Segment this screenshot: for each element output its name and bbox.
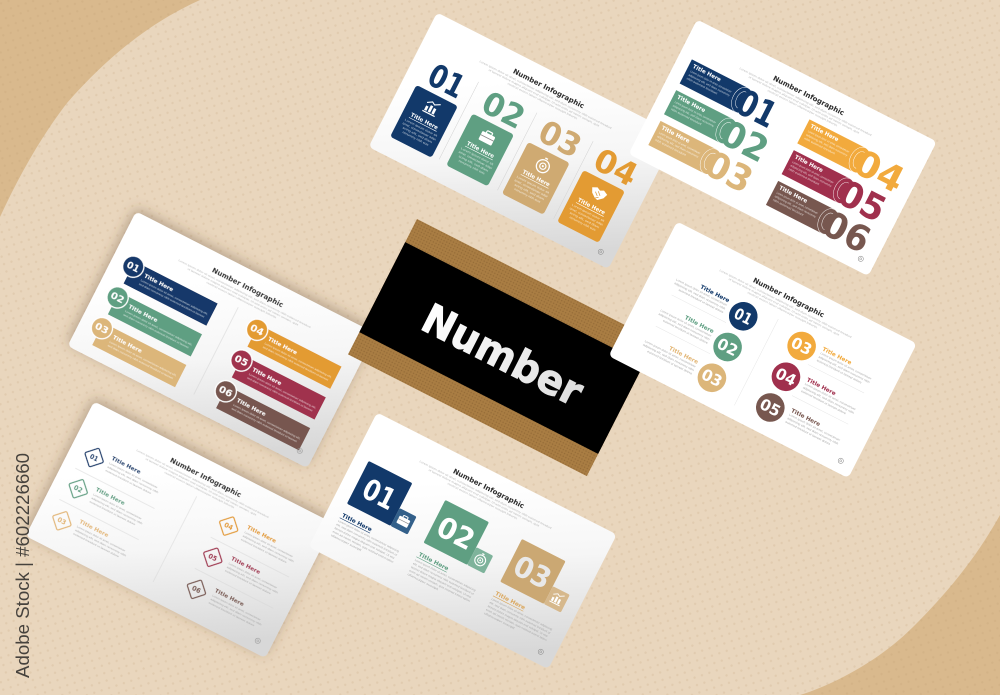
item 03: euismod tincidunt ut laoreet dolore: [73, 532, 120, 559]
item 05: Lorem ipsum dolor sit amet, consectetuer: [788, 413, 841, 442]
card 3: Lorem ipsum dolor sit: [516, 175, 550, 195]
ribbon 01: Title Here: [143, 273, 174, 293]
heading: Number Infographic: [452, 467, 526, 510]
ribbon 03: sed diam nonummy nibh euismod tincidunt ut laoreet: [107, 343, 174, 380]
item 05: Lorem ipsum dolor sit amet, consectetuer: [228, 561, 278, 590]
panel: six cylinder bars slide: [629, 19, 937, 276]
ribbon 02: Title Here: [127, 304, 159, 324]
intro text: ut laoreet dolore magna aliquam erat volutpat. Ut wisi enim ad minim veniam, quis: [428, 468, 541, 528]
item 03 left: Title Here: [668, 346, 699, 366]
icon: copyright mark: [537, 648, 544, 655]
panel: ribbon bars slide: [68, 211, 376, 468]
item 05: Title Here: [790, 408, 821, 428]
cover title: Number: [414, 294, 592, 416]
band texture: [348, 219, 656, 476]
block 03: Lorem ipsum dolor sit amet, consectetuer adipiscing: [491, 597, 553, 632]
bar 06: Title Here: [778, 185, 808, 205]
item 04: euismod tincidunt ut laoreet dolore: [240, 537, 288, 564]
bar 04: nibh euismod tincidunt: [804, 136, 836, 155]
item 06: Title Here: [213, 588, 245, 608]
item 03 left: euismod tincidunt ut laoreet dolore: [647, 349, 693, 376]
bar 05: 05: [831, 173, 892, 231]
ribbon 01: Lorem ipsum dolor sit amet, consectetuer adipiscing elit,: [140, 278, 209, 316]
number 03: 03: [532, 112, 588, 166]
item 04: [767, 358, 861, 425]
slide background: [369, 12, 677, 269]
card 3: scing elit, sed diam: [514, 183, 546, 201]
heading: Number Infographic: [752, 276, 826, 319]
item 06: [182, 575, 268, 633]
item 04: 04: [223, 521, 234, 532]
card 2: Lorem ipsum dolor sit: [460, 146, 494, 166]
ribbon 04: Title Here: [267, 337, 298, 357]
ribbon 06: [207, 376, 313, 450]
slide background: [609, 221, 917, 478]
item 05: euismod tincidunt ut laoreet dolore: [224, 569, 272, 595]
intro text: Lorem ipsum dolor sit amet, consectetuer adipiscing elit, sed diam nonummy nibh euismod tincidunt: [739, 66, 873, 137]
card 1: Title Here: [409, 112, 439, 131]
card 2: [446, 114, 514, 186]
intro text: ut laoreet dolore magna aliquam erat volutpat. Ut wisi enim ad minim veniam, quis: [748, 75, 861, 135]
block 02: ullamcorper suscipit: [407, 572, 439, 591]
bar 01: adipiscing elit, sed diam nonummy: [688, 73, 731, 98]
item 02: Title Here: [683, 315, 715, 335]
intro text: ut laoreet dolore magna aliquam erat volutpat. Ut wisi enim ad minim veniam, quis: [488, 68, 601, 128]
intro text: [736, 66, 873, 143]
card 3: nonummy nibh euis: [514, 187, 542, 204]
slide background: [26, 401, 334, 658]
item 04: Title Here: [805, 377, 837, 397]
card 1: Lorem ipsum dolor sit: [404, 118, 438, 138]
item 03 left: adipiscing elit, sed diam nonummy nibh: [642, 343, 695, 372]
bar 02: Title Here: [676, 95, 706, 114]
card 4: [557, 170, 625, 243]
intro text: nostrud exerci tation ullamcorper suscipit lobortis: [507, 81, 579, 121]
card 3: amet, consectetuer adipi: [514, 178, 549, 199]
ribbon 02: [99, 282, 205, 357]
intro text: [175, 258, 312, 335]
block 01: Lorem ipsum dolor sit amet, consectetuer adipiscing: [337, 519, 400, 553]
icon: copyright mark: [254, 637, 261, 644]
bar 03: Lorem ipsum dolor sit amet, consectetuer: [658, 131, 701, 155]
item 04: 04: [772, 364, 799, 390]
ribbon 05: Lorem ipsum dolor sit amet, consectetuer adipiscing elit,: [248, 372, 317, 410]
bar 06: [762, 176, 877, 262]
intro text: ut laoreet dolore magna aliquam erat volutpat. Ut wisi enim ad minim veniam, quis: [728, 277, 841, 337]
brown band background: [348, 219, 656, 476]
intro text: nostrud exerci tation ullamcorper suscipit lobortis: [206, 280, 278, 320]
card 2: Title Here: [465, 141, 495, 160]
item 05: 05: [207, 552, 218, 563]
bar 05: Title Here: [793, 155, 824, 174]
bar 06: nibh euismod tincidunt: [772, 198, 805, 217]
icon: copyright mark: [296, 447, 303, 454]
intro text: Lorem ipsum dolor sit amet, consectetuer adipiscing elit, sed diam nonummy nibh euismod tincidunt: [719, 268, 853, 339]
item 03 right: 03: [788, 334, 815, 359]
bar 04: adipiscing elit, sed diam nonummy: [805, 133, 849, 157]
item 02: adipiscing elit, sed diam nonummy nibh: [658, 312, 711, 342]
item 03 left: [637, 330, 731, 397]
item 02: 02: [72, 484, 84, 495]
card 4: nonummy nibh euis: [569, 215, 597, 232]
ribbon 01: [114, 251, 220, 326]
item 04: euismod tincidunt ut laoreet dolore: [800, 389, 847, 415]
column dividers: [439, 82, 594, 219]
block 03: Title Here: [494, 591, 526, 612]
bar 01: Title Here: [691, 64, 722, 83]
card 4: amet, consectetuer adipi: [569, 206, 604, 227]
ribbon 05: 05: [232, 353, 250, 369]
ribbon 03: Title Here: [111, 335, 143, 355]
bar 04: Title Here: [809, 124, 840, 143]
block 02: Lorem ipsum dolor sit amet, consectetuer adipiscing: [414, 558, 477, 592]
ribbon 03: [83, 313, 189, 387]
ribbon 06: Lorem ipsum dolor sit amet, consectetuer adipiscing elit,: [233, 403, 301, 441]
item 04: [214, 512, 300, 569]
bar 06: 06: [815, 204, 877, 262]
bar 03: [644, 116, 759, 202]
slide background: [68, 211, 376, 468]
ribbon 03: 03: [93, 321, 110, 337]
card 4: scing elit, sed diam: [569, 211, 601, 230]
dividers: [45, 441, 303, 636]
item 02: [64, 474, 149, 532]
black center band: [359, 242, 644, 454]
ribbon 06: 06: [217, 384, 234, 400]
card 4: Title Here: [576, 198, 606, 217]
intro text: nostrud exerci tation ullamcorper suscipit lobortis: [767, 88, 839, 128]
item 02: 02: [714, 335, 741, 360]
intro text: Lorem ipsum dolor sit amet, consectetuer adipiscing elit, sed diam nonummy nibh euismod tincidunt: [479, 59, 613, 130]
item 03: adipiscing elit, sed diam nonummy nibh: [74, 528, 127, 558]
panel: four numbered cards slide: [369, 12, 677, 269]
number 01: 01: [422, 56, 471, 106]
item 02: adipiscing elit, sed diam nonummy nibh: [91, 496, 144, 526]
item 06: 06: [190, 584, 202, 595]
ribbon 05: sed diam nonummy nibh euismod tincidunt ut laoreet: [246, 376, 313, 413]
item 01: Title Here: [699, 284, 730, 304]
icon: copyright mark: [837, 457, 844, 464]
item 02: euismod tincidunt ut laoreet dolore: [662, 319, 709, 345]
bar 05: nibh euismod tincidunt: [788, 167, 820, 186]
block 03: [483, 539, 583, 646]
dividers: [640, 271, 876, 455]
card 1: [390, 85, 458, 158]
ribbon 05: Title Here: [251, 367, 282, 387]
item 03 right: adipiscing elit, sed diam nonummy nibh: [818, 355, 871, 384]
item 03: [48, 507, 132, 564]
ribbon 02: Lorem ipsum dolor sit amet, consectetuer adipiscing elit,: [124, 309, 193, 347]
intro text: [416, 459, 553, 536]
card 1: scing elit, sed diam: [402, 126, 434, 144]
intro text: nostrud exerci tation ullamcorper suscipit lobortis: [447, 481, 519, 521]
card 3: [502, 142, 570, 215]
block 02: 02: [431, 510, 480, 557]
panel: diamond outline list slide: [26, 401, 334, 658]
item 02: [653, 300, 747, 366]
ribbon 02: 02: [108, 290, 126, 306]
intro text: nostrud exerci tation ullamcorper suscipit lobortis: [747, 290, 819, 330]
bar 03: 03: [698, 144, 759, 202]
item 02: Lorem ipsum dolor sit amet, consectetuer: [660, 308, 712, 338]
vertical stock id label: Adobe Stock | #602226660: [12, 453, 33, 678]
intro text: [133, 448, 270, 525]
ribbon 04: 04: [248, 323, 265, 339]
ribbon 04: [238, 315, 344, 389]
ribbon 05: [223, 345, 329, 420]
bar 05: Lorem ipsum dolor sit amet, consectetuer: [792, 160, 834, 184]
item 03 right: Lorem ipsum dolor sit amet, consectetuer: [820, 351, 872, 381]
heading: Number Infographic: [512, 67, 586, 110]
block 03: enim ad minim veniam, quis nostrud exerci tation: [485, 608, 548, 642]
block 02: elit, sed diam nonummy nibh euismod tincidunt ut: [412, 561, 475, 596]
intro text: Lorem ipsum dolor sit amet, consectetuer adipiscing elit, sed diam nonummy nibh euismod tincidunt: [178, 258, 312, 329]
intro text: ut laoreet dolore magna aliquam erat volutpat. Ut wisi enim ad minim veniam, quis: [187, 267, 300, 327]
item 03: 03: [56, 516, 68, 527]
panel: circle numbers list slide: [609, 221, 917, 478]
intro text: [716, 268, 853, 345]
ribbon 04: Lorem ipsum dolor sit amet, consectetuer adipiscing elit,: [264, 341, 333, 379]
center divider: [194, 307, 238, 395]
block 01: ullamcorper suscipit: [330, 533, 362, 552]
item 04: adipiscing elit, sed diam nonummy nibh: [802, 385, 855, 415]
block 01: laoreet dolore magna aliquam erat volutpat. Ut wisi: [334, 526, 396, 560]
heading: Number Infographic: [169, 456, 243, 499]
intro text: nostrud exerci tation ullamcorper suscipit lobortis: [164, 470, 236, 510]
item 01: Lorem ipsum dolor sit amet, consectetuer: [675, 278, 728, 307]
block 02: laoreet dolore magna aliquam erat volutpat. Ut wisi: [410, 565, 472, 599]
intro text: ut laoreet dolore magna aliquam erat volutpat. Ut wisi enim ad minim veniam, quis: [145, 457, 258, 517]
bar 02: 02: [713, 113, 775, 171]
heading: Number Infographic: [772, 74, 846, 117]
number 02: 02: [476, 84, 531, 137]
bar 06: Lorem ipsum dolor sit amet, consectetuer: [776, 191, 819, 215]
item 05: 05: [757, 395, 784, 421]
ribbon 06: Title Here: [235, 398, 267, 418]
ribbon 03: Lorem ipsum dolor sit amet, consectetuer adipiscing elit,: [109, 340, 178, 378]
item 03 right: Title Here: [821, 347, 852, 367]
item 01: Title Here: [110, 456, 142, 476]
card 3: Title Here: [521, 169, 551, 188]
item 03: Title Here: [78, 519, 109, 539]
block 01: Title Here: [341, 513, 373, 533]
block 03: laoreet dolore magna aliquam erat volutpat. Ut wisi: [487, 604, 549, 638]
item 05: euismod tincidunt ut laoreet dolore: [785, 420, 831, 446]
item 01: adipiscing elit, sed diam nonummy nibh: [674, 281, 727, 311]
ribbon 01: sed diam nonummy nibh euismod tincidunt ut laoreet: [138, 282, 205, 319]
bar 02: nibh euismod tincidunt: [670, 107, 703, 126]
item 03 right: euismod tincidunt ut laoreet dolore: [816, 358, 863, 385]
heading: Number Infographic: [211, 266, 285, 309]
block 01: [330, 461, 430, 568]
icon: copyright mark: [857, 255, 864, 262]
ribbon 04: sed diam nonummy nibh euismod tincidunt ut laoreet: [262, 345, 329, 382]
item 04: adipiscing elit, sed diam nonummy nibh: [242, 534, 295, 563]
bar 01: nibh euismod tincidunt: [686, 76, 718, 95]
card 2: scing elit, sed diam: [458, 154, 490, 173]
intro text: Lorem ipsum dolor sit amet, consectetuer adipiscing elit, sed diam nonummy nibh euismod tincidunt: [136, 448, 270, 519]
ribbon 06: sed diam nonummy nibh euismod tincidunt ut laoreet: [231, 406, 298, 443]
item 06: euismod tincidunt ut laoreet dolore: [208, 601, 256, 628]
item 03 left: Lorem ipsum dolor sit amet, consectetuer: [644, 339, 697, 368]
card 1: amet, consectetuer adipi: [402, 121, 437, 142]
block 02: [407, 500, 506, 607]
bar 01: Lorem ipsum dolor sit amet, consectetuer: [690, 69, 732, 94]
card 2: nonummy nibh euis: [458, 159, 486, 176]
item 01: euismod tincidunt ut laoreet dolore: [105, 468, 152, 495]
intro text: Lorem ipsum dolor sit amet, consectetuer adipiscing elit, sed diam nonummy nibh euismod tincidunt: [419, 459, 553, 530]
item 02: euismod tincidunt ut laoreet dolore: [89, 500, 137, 526]
item 04: Lorem ipsum dolor sit amet, consectetuer: [244, 530, 294, 558]
item 05: adipiscing elit, sed diam nonummy nibh: [787, 416, 840, 446]
block 02: enim ad minim veniam, quis nostrud exerci tation: [409, 569, 471, 603]
item 05: [751, 388, 846, 455]
block 03: elit, sed diam nonummy nibh euismod tincidunt ut: [489, 600, 551, 635]
bar 02: Lorem ipsum dolor sit amet, consectetuer: [674, 100, 717, 124]
item 05: adipiscing elit, sed diam nonummy nibh: [226, 565, 279, 595]
block 01: elit, sed diam nonummy nibh euismod tincidunt ut: [336, 522, 398, 557]
bar 04: Lorem ipsum dolor sit amet, consectetuer: [807, 129, 850, 154]
bar 01: 01: [729, 82, 783, 137]
block 03: ullamcorper suscipit: [483, 611, 516, 630]
bar 03: Title Here: [660, 125, 691, 145]
intro text: [476, 59, 613, 136]
slide background: [629, 19, 937, 276]
item 01: [80, 443, 164, 500]
bar 05: [778, 146, 892, 231]
card 2: amet, consectetuer adipi: [458, 150, 493, 170]
bar 06: adipiscing elit, sed diam nonummy: [774, 194, 817, 219]
block 01: 01: [357, 472, 402, 517]
item 04: Lorem ipsum dolor sit amet, consectetuer: [804, 382, 857, 411]
item 06: adipiscing elit, sed diam nonummy nibh: [210, 597, 263, 627]
bar 04: 04: [847, 142, 911, 202]
item 04: Title Here: [246, 525, 277, 545]
item 03 left: 03: [698, 365, 725, 391]
bar 03: adipiscing elit, sed diam nonummy: [656, 134, 700, 159]
item 06: Lorem ipsum dolor sit amet, consectetuer: [212, 594, 262, 622]
item 05: [199, 543, 284, 601]
bar 05: adipiscing elit, sed diam nonummy: [790, 163, 833, 188]
panel: large square numbers slide: [309, 412, 617, 669]
block 03: 03: [508, 549, 557, 596]
item 01: euismod tincidunt ut laoreet dolore: [678, 288, 725, 314]
card 4: Lorem ipsum dolor sit: [571, 203, 605, 223]
item 01: Lorem ipsum dolor sit amet, consectetuer: [108, 461, 158, 489]
item 01: [669, 269, 762, 336]
icon: copyright mark: [597, 248, 604, 255]
item 01: 01: [88, 453, 100, 464]
bar 04: [793, 115, 911, 202]
bar 03: nibh euismod tincidunt: [655, 138, 687, 157]
card 1: nonummy nibh euis: [402, 130, 430, 147]
panel: central Number cover card: [348, 219, 656, 476]
number 04: 04: [587, 140, 644, 194]
item 01: 01: [731, 305, 755, 329]
bar 02: [660, 86, 775, 171]
ribbon 01: 01: [124, 260, 141, 275]
block 02: Title Here: [417, 552, 449, 572]
item 05: Title Here: [230, 556, 261, 576]
item 02: Lorem ipsum dolor sit amet, consectetuer: [93, 492, 142, 521]
slide background: [309, 412, 617, 669]
item 03: Lorem ipsum dolor sit amet, consectetuer: [76, 525, 126, 553]
item 02: Title Here: [94, 487, 126, 507]
block 01: enim ad minim veniam, quis nostrud exerci tation: [332, 529, 395, 564]
ribbon 02: sed diam nonummy nibh euismod tincidunt ut laoreet: [123, 313, 190, 349]
bar 02: adipiscing elit, sed diam nonummy: [672, 104, 715, 128]
item 01: adipiscing elit, sed diam nonummy nibh: [107, 465, 160, 494]
item 03 right: [782, 327, 877, 394]
bar 01: [676, 55, 783, 137]
